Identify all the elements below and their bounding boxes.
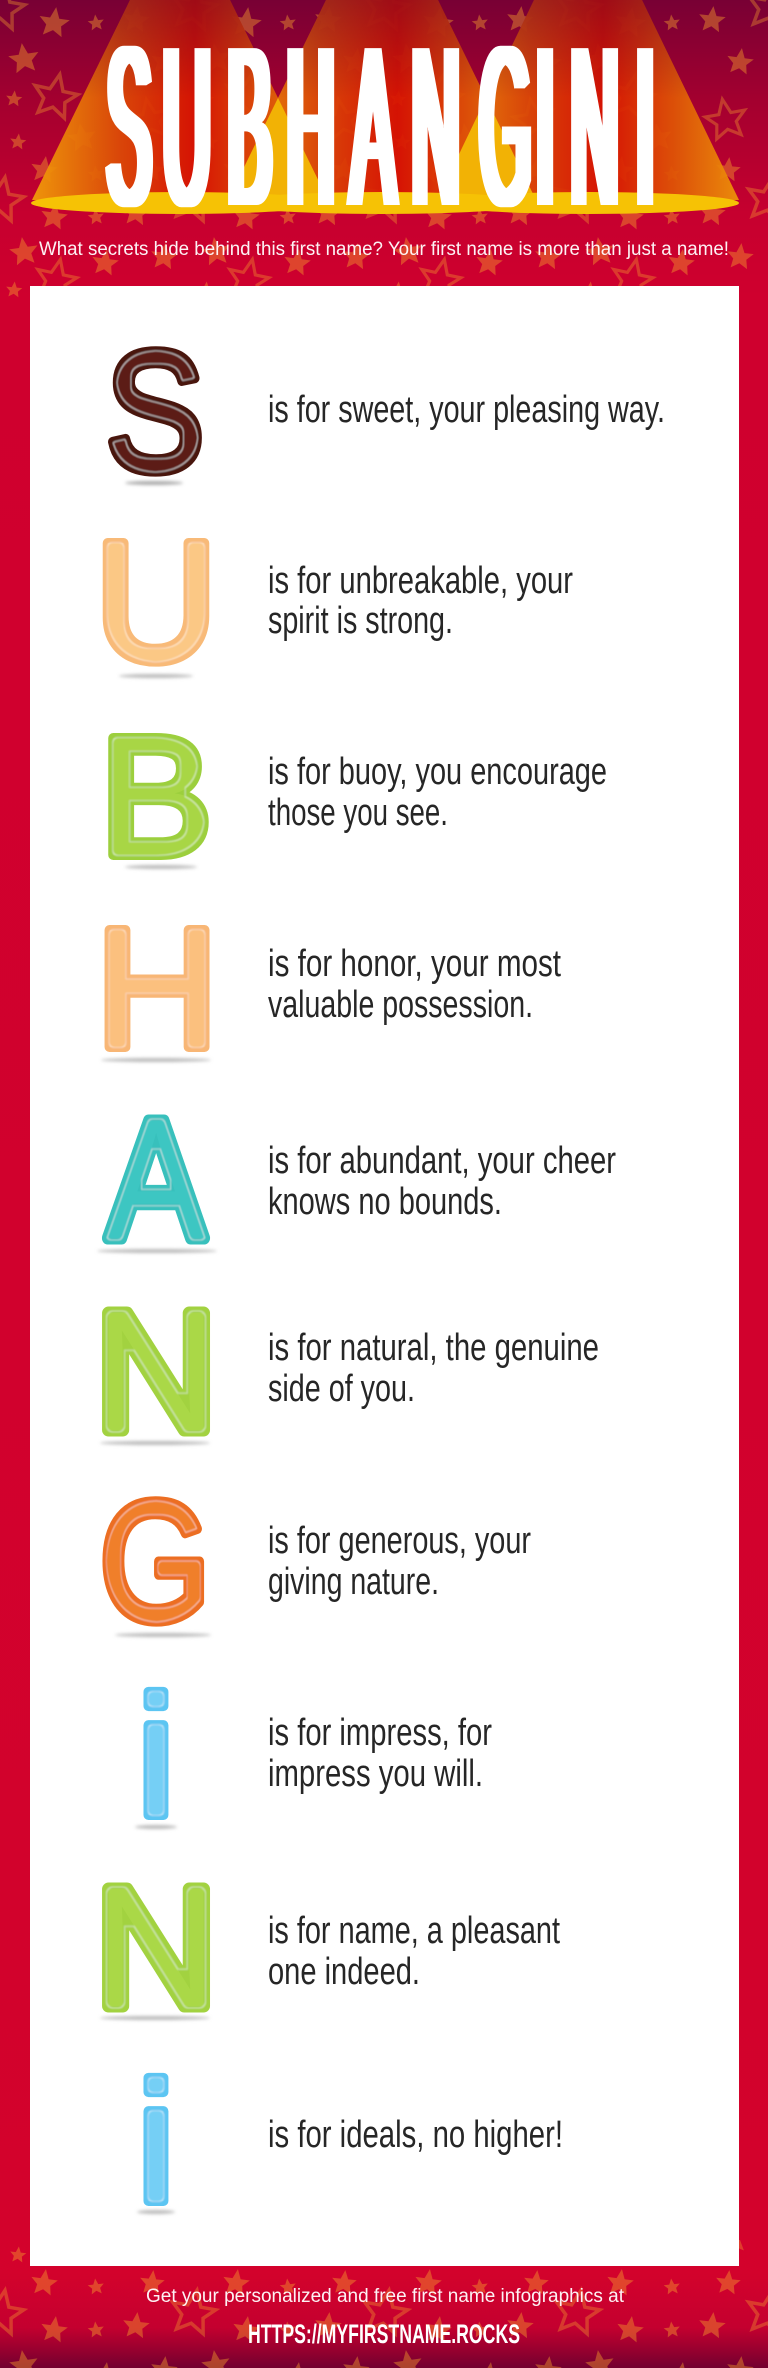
row: I second — [137, 2048, 563, 2238]
text I: is for impress, for — [268, 1712, 492, 1754]
row: B — [99, 702, 607, 892]
text N second — [268, 1910, 560, 1993]
letter N: N — [95, 1277, 217, 1467]
text N: side of you. — [268, 1368, 415, 1410]
text G — [268, 1520, 531, 1603]
text N second: one indeed. — [268, 1951, 420, 1993]
text H: is for honor, your most — [268, 943, 561, 985]
row: G — [99, 1467, 531, 1657]
text H — [268, 943, 561, 1026]
letter B: B — [99, 702, 213, 892]
footer url: HTTPS://MYFIRSTNAME.ROCKS — [248, 2319, 520, 2349]
text H: valuable possession. — [268, 984, 533, 1026]
letter G: G — [99, 1467, 211, 1657]
letter i second: i — [137, 2048, 175, 2238]
text I: impress you will. — [268, 1753, 483, 1795]
text N: is for natural, the genuine — [268, 1327, 599, 1369]
text B: is for buoy, you encourage — [268, 751, 607, 793]
title: SUBHANGINI — [107, 0, 654, 254]
row: I — [135, 1662, 492, 1852]
text B — [268, 751, 607, 834]
letter H: H — [96, 894, 218, 1084]
row: N — [95, 1277, 599, 1467]
text U: spirit is strong. — [268, 600, 453, 642]
text G: is for generous, your — [268, 1520, 531, 1562]
letter U: U — [95, 507, 217, 697]
panel: white letters card — [30, 286, 739, 2266]
text U — [268, 560, 573, 642]
row: U — [95, 507, 573, 697]
text A: is for abundant, your cheer — [268, 1140, 616, 1182]
letter A: A — [107, 1084, 205, 1274]
text A — [268, 1140, 616, 1223]
letter N second: N — [95, 1853, 217, 2043]
text I — [268, 1712, 492, 1795]
spotlights — [31, 0, 739, 214]
text G: giving nature. — [268, 1561, 439, 1603]
text U: is for unbreakable, your — [268, 560, 573, 602]
letter S: S — [106, 316, 204, 506]
text I second: is for ideals, no higher! — [268, 2114, 563, 2156]
star pattern bottom — [0, 2240, 768, 2368]
row: N second — [95, 1853, 560, 2043]
subtitle: What secrets hide behind this first name? Your first name is more than just a name! — [39, 239, 729, 260]
text B: those you see. — [268, 792, 448, 834]
row: S — [106, 316, 665, 506]
row: H — [96, 894, 561, 1084]
text N — [268, 1327, 599, 1410]
footer text: Get your personalized and free first name infographics at — [146, 2286, 625, 2307]
text N second: is for name, a pleasant — [268, 1910, 560, 1952]
letter i: i — [137, 1662, 175, 1852]
row: A — [97, 1084, 616, 1274]
text A: knows no bounds. — [268, 1181, 502, 1223]
star pattern top — [0, 0, 768, 298]
